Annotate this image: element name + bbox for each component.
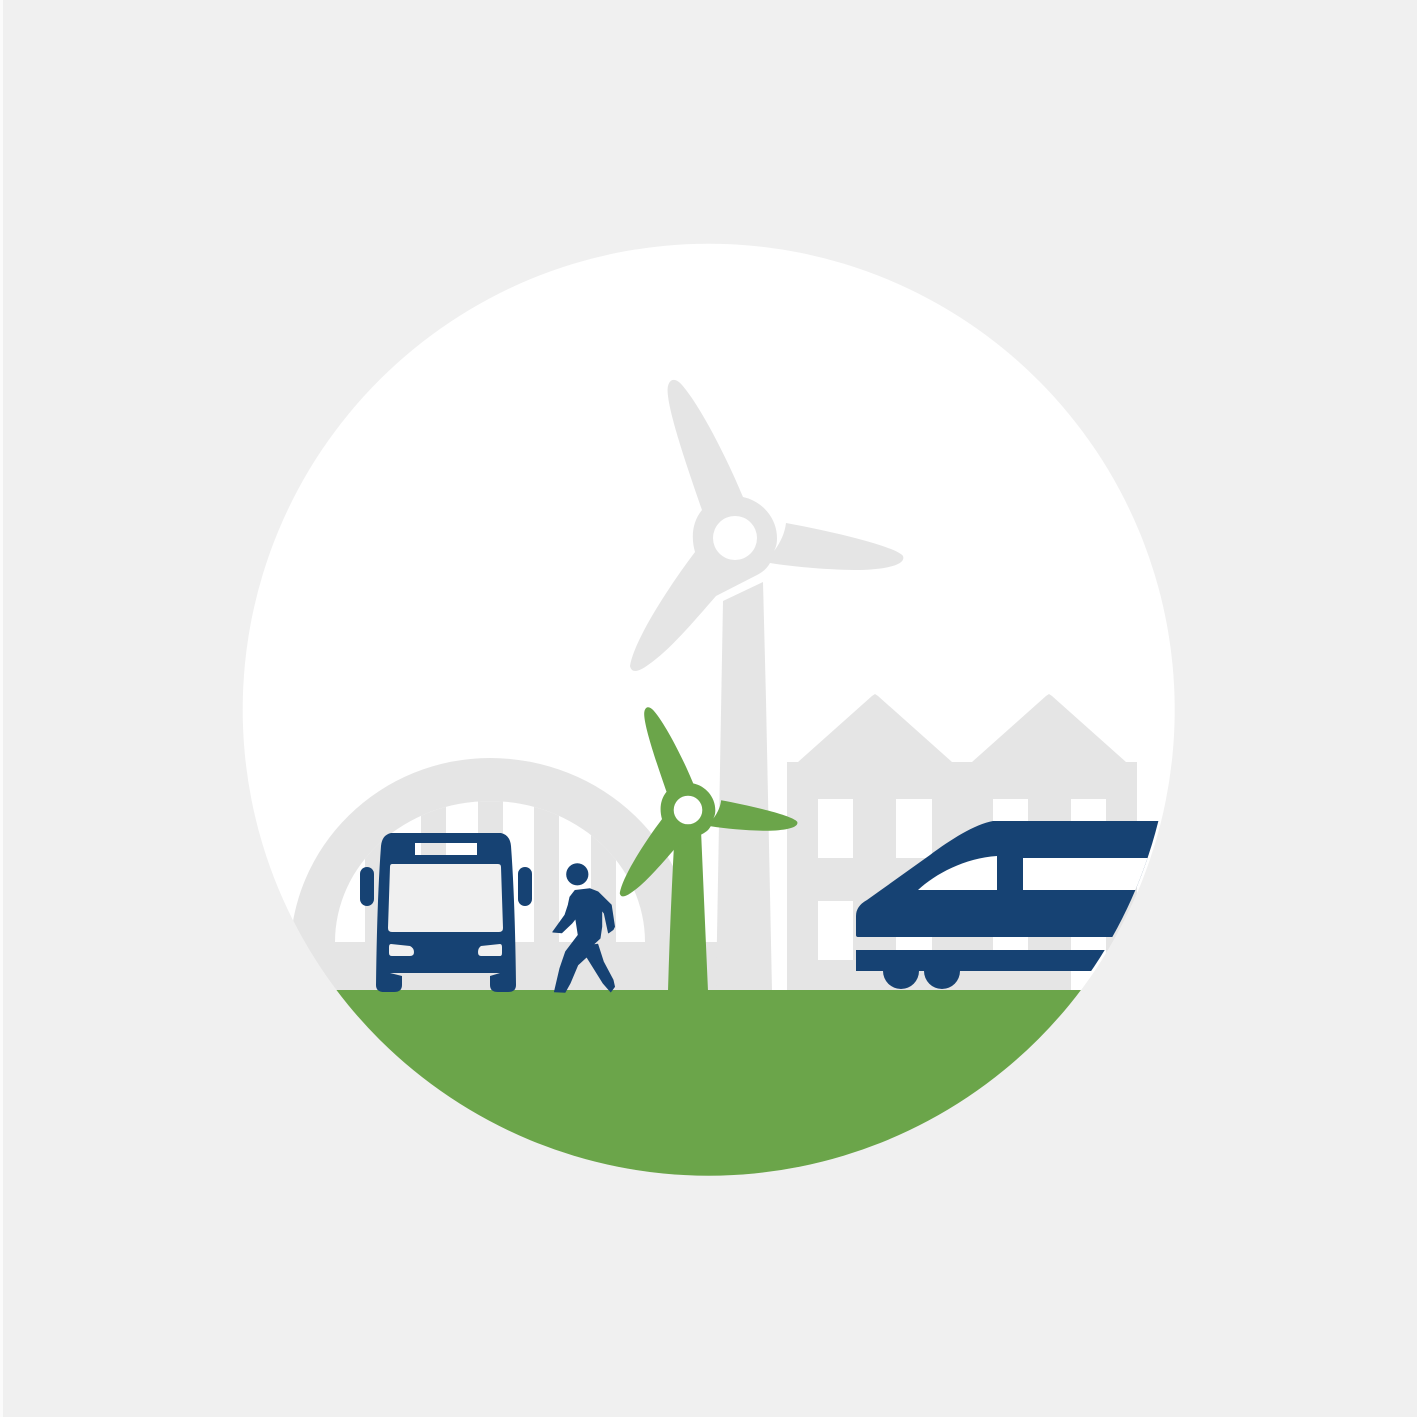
large grey wind turbine <box>630 380 903 991</box>
arched bridge <box>290 758 720 991</box>
green ground <box>336 990 1081 1176</box>
icon: bus <box>360 833 532 992</box>
scene clipped to circle <box>293 380 1158 1176</box>
icon: walking person <box>553 864 614 992</box>
green wind turbine <box>620 707 797 991</box>
grey terraced houses <box>787 694 1137 991</box>
white circle panel <box>243 244 1175 1176</box>
icon: high-speed train <box>856 821 1183 989</box>
